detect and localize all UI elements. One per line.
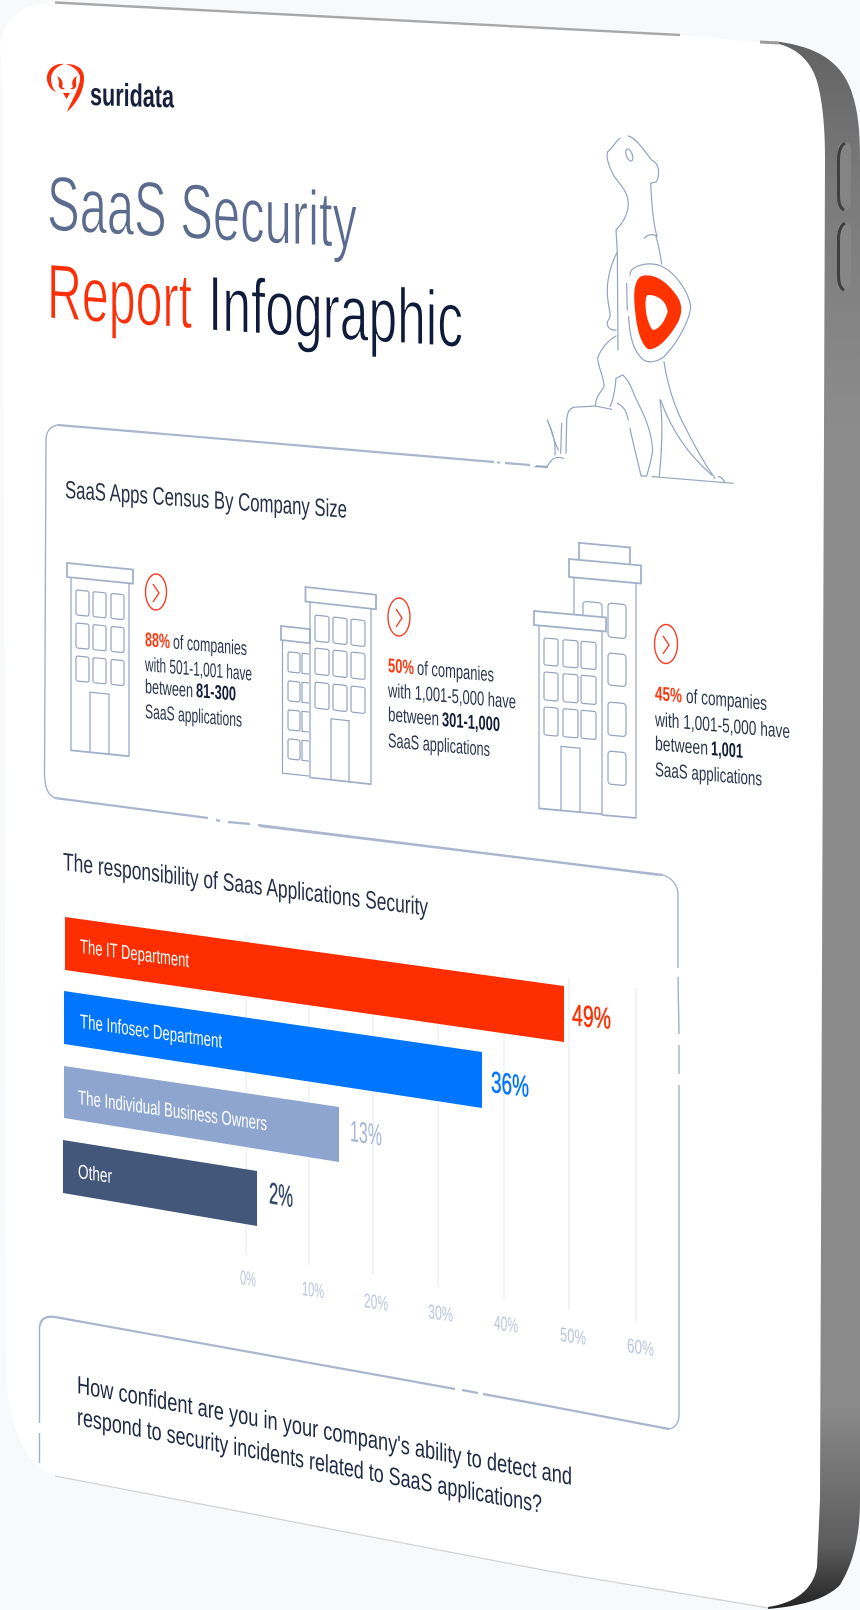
icon: side button lower bbox=[838, 222, 851, 290]
icon: side button upper bbox=[838, 142, 851, 210]
value: 13%: 13% bbox=[350, 1115, 382, 1153]
value: 49%: 49% bbox=[572, 999, 611, 1036]
text: census stat 3: 1,001 bbox=[711, 738, 743, 763]
text: census stat 1: SaaS applications bbox=[145, 701, 242, 732]
icon: large buildings bbox=[534, 542, 641, 818]
meerkat illustration bbox=[535, 136, 733, 483]
text: census stat 3: with 1,001-5,000 have bbox=[654, 709, 790, 743]
icon: arrow circle 1 bbox=[146, 574, 166, 610]
device frame bbox=[768, 41, 860, 1609]
title bbox=[47, 159, 463, 364]
text: census stat 2: with 1,001-5,000 have bbox=[387, 680, 516, 714]
value: 36%: 36% bbox=[491, 1066, 529, 1104]
logo wordmark: suridata bbox=[90, 76, 174, 115]
bar: The IT Department: The IT Department bbox=[80, 936, 189, 972]
title: Infographic bbox=[208, 259, 463, 364]
chart grid lines bbox=[246, 935, 636, 1322]
panel: responsibility outline bbox=[40, 826, 679, 1463]
icon: medium buildings bbox=[281, 587, 376, 785]
text: census stat 2: SaaS applications bbox=[388, 730, 490, 761]
title: SaaS Security bbox=[47, 159, 357, 265]
text: census stat 1: 88% bbox=[145, 629, 170, 653]
bar: The Individual Business Owners bbox=[64, 1066, 339, 1162]
title: Report bbox=[47, 247, 192, 345]
bar: The IT Department bbox=[65, 917, 564, 1042]
text: census stat 3: of companies bbox=[686, 686, 767, 715]
chart axis labels: 30% bbox=[428, 1301, 453, 1327]
chart axis labels: 0% bbox=[240, 1267, 256, 1291]
heading: census: SaaS Apps Census By Company Size bbox=[65, 476, 347, 524]
text: census stat 1: of companies bbox=[173, 632, 247, 660]
text: census stat 3 bbox=[654, 683, 790, 791]
text: census stat 1: between bbox=[145, 676, 193, 702]
text: census stat 2: 301-1,000 bbox=[442, 709, 500, 736]
bar: The Individual Business Owners: The Individual Business Owners bbox=[78, 1087, 267, 1135]
panel: census outline bbox=[44, 425, 660, 875]
question text bbox=[77, 1371, 572, 1519]
chart axis labels: 40% bbox=[494, 1312, 518, 1338]
text: census stat 2: 50% bbox=[388, 655, 414, 679]
bar: The Infosec Department: The Infosec Department bbox=[80, 1011, 222, 1053]
chart axis labels: 20% bbox=[364, 1290, 388, 1316]
icon: meerkat logo bbox=[47, 64, 84, 112]
text: census stat 3: between bbox=[655, 733, 708, 760]
bar: Other bbox=[63, 1140, 257, 1226]
value: 2%: 2% bbox=[269, 1177, 293, 1214]
chart axis labels: 50% bbox=[560, 1324, 586, 1350]
logo bbox=[47, 64, 174, 115]
chart axis labels: 10% bbox=[302, 1278, 324, 1303]
text: census stat 3: SaaS applications bbox=[655, 759, 762, 791]
chart axis labels: 60% bbox=[627, 1335, 654, 1361]
page content bbox=[40, 64, 790, 1519]
question text: respond to security incidents related to SaaS applications? bbox=[77, 1403, 542, 1519]
text: census stat 1: with 501-1,001 have bbox=[144, 654, 252, 686]
text: census stat 1 bbox=[144, 629, 252, 732]
bar: The Infosec Department bbox=[64, 991, 482, 1108]
text: census stat 2: between bbox=[388, 704, 439, 731]
text: census stat 2 bbox=[387, 655, 516, 761]
text: census stat 1: 81-300 bbox=[196, 680, 236, 706]
icon: arrow circle 2 bbox=[388, 598, 410, 636]
icon: arrow circle 3 bbox=[654, 624, 678, 664]
bar: Other: Other bbox=[78, 1161, 112, 1188]
heading: responsibility: The responsibility of Saas Applications Security bbox=[63, 848, 428, 922]
chart axis labels bbox=[240, 1267, 654, 1361]
bar chart: responsibility bbox=[63, 917, 654, 1361]
question text: How confident are you in your company's ability to detect and bbox=[77, 1371, 572, 1491]
text: census stat 3: 45% bbox=[655, 683, 682, 707]
icon: small building bbox=[67, 563, 133, 757]
text: census stat 2: of companies bbox=[417, 658, 494, 687]
